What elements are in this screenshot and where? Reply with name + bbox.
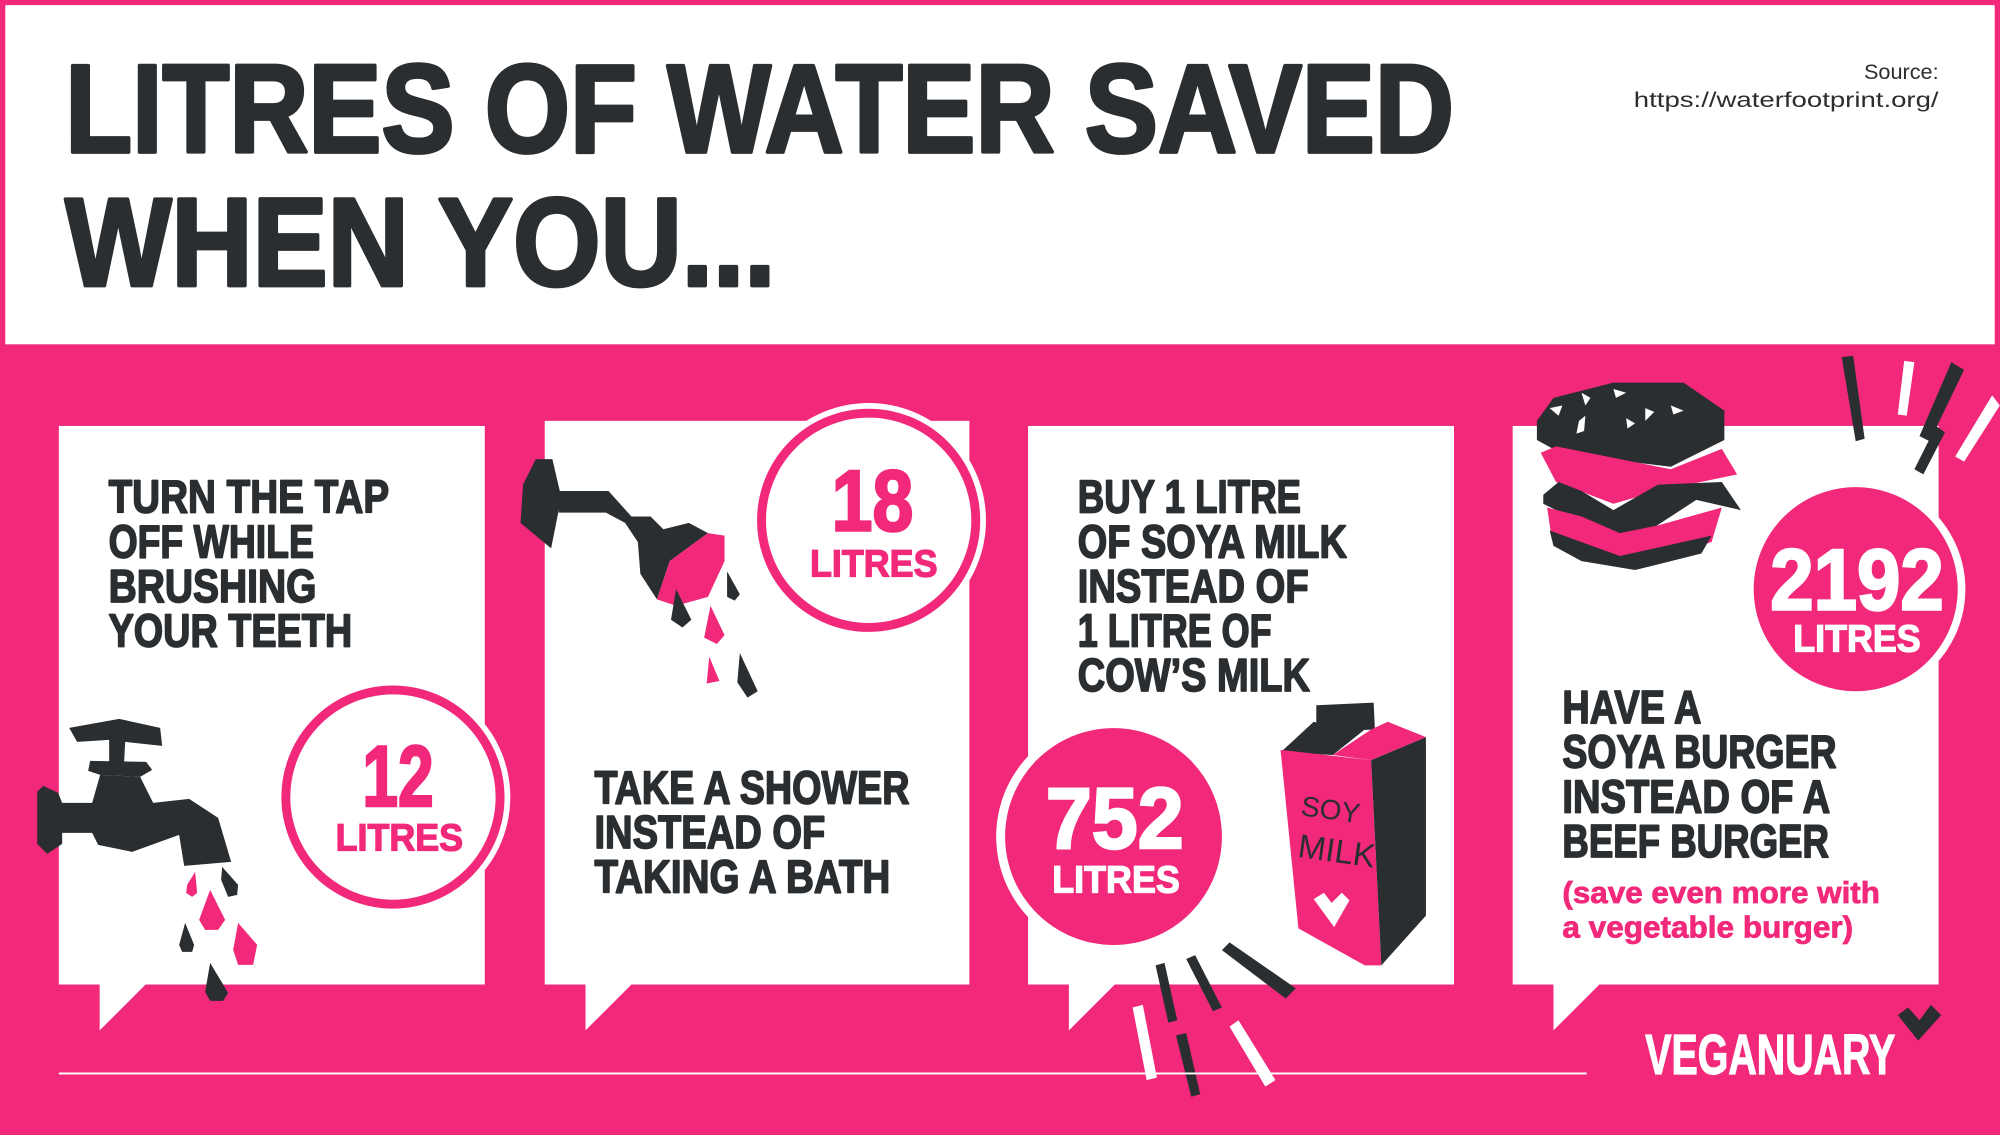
text: soya milk: 1 LITRE OF bbox=[1078, 605, 1272, 657]
icon: milk carton: MILK bbox=[1296, 828, 1378, 875]
logo: veganuary: VEGANUARY bbox=[1645, 1023, 1895, 1086]
icon: milk carton bbox=[1281, 703, 1426, 965]
callout: 752 litres: LITRES bbox=[1052, 859, 1180, 902]
bottom rule bbox=[59, 1073, 1587, 1074]
text: soya milk: INSTEAD OF bbox=[1078, 560, 1309, 612]
text: shower bbox=[594, 761, 909, 903]
callout: 18 litres: 18 bbox=[832, 454, 913, 550]
text: burger: INSTEAD OF A bbox=[1562, 770, 1830, 822]
text: tap: OFF WHILE bbox=[109, 515, 314, 567]
callout: 12 litres: LITRES bbox=[336, 817, 463, 860]
icon: tap bbox=[37, 719, 257, 1001]
decorative burst lines: burger bbox=[1842, 356, 2000, 474]
panel: shower bbox=[520, 421, 969, 1030]
text: tap: YOUR TEETH bbox=[109, 605, 352, 657]
note: vegetable burger: a vegetable burger) bbox=[1562, 910, 1853, 944]
title: WHEN YOU... bbox=[65, 174, 776, 313]
decorative burst lines: milk bbox=[1133, 942, 1296, 1097]
icon: milk carton: SOY bbox=[1299, 790, 1362, 829]
callout: 2192 litres: LITRES bbox=[1793, 618, 1921, 661]
callout: 2192 litres: 2192 bbox=[1770, 533, 1944, 629]
panel: tap bbox=[37, 426, 485, 1030]
callout: 2192 litres bbox=[1746, 480, 1965, 699]
icon: shower head bbox=[520, 459, 758, 698]
callout: 18 litres: LITRES bbox=[810, 542, 938, 585]
text: burger: HAVE A bbox=[1562, 681, 1701, 733]
panel: burger bbox=[1513, 426, 1939, 1030]
title bbox=[65, 40, 1454, 313]
text: soya milk: BUY 1 LITRE bbox=[1078, 471, 1301, 523]
panel: soya milk bbox=[1028, 426, 1454, 1030]
note: vegetable burger: (save even more with bbox=[1562, 876, 1880, 910]
text: soya milk bbox=[1078, 471, 1347, 701]
text: shower: TAKE A SHOWER bbox=[594, 761, 909, 813]
text: shower: TAKING A BATH bbox=[594, 851, 890, 903]
callout: 12 litres: 12 bbox=[362, 729, 434, 825]
icon: burger bbox=[1537, 383, 1741, 570]
callout: 752 litres: 752 bbox=[1046, 771, 1184, 867]
note: vegetable burger bbox=[1562, 876, 1880, 944]
logo: veganuary bbox=[1645, 1005, 1941, 1086]
source note: https://waterfootprint.org/ bbox=[1634, 87, 1940, 112]
source note bbox=[1634, 59, 1940, 112]
source note: Source: bbox=[1864, 59, 1939, 84]
text: burger: SOYA BURGER bbox=[1562, 726, 1837, 778]
text: tap: BRUSHING bbox=[109, 560, 316, 612]
callout: 752 litres bbox=[996, 719, 1231, 954]
title: LITRES OF WATER SAVED bbox=[65, 40, 1454, 179]
text: soya milk: COW’S MILK bbox=[1078, 649, 1310, 701]
text: burger: BEEF BURGER bbox=[1562, 815, 1829, 867]
text: soya milk: OF SOYA MILK bbox=[1078, 515, 1347, 567]
text: burger bbox=[1562, 681, 1837, 867]
callout: 12 litres bbox=[276, 680, 510, 914]
callout: 18 litres bbox=[751, 403, 986, 638]
header panel bbox=[5, 5, 1995, 344]
text: tap: TURN THE TAP bbox=[109, 471, 389, 523]
text: tap bbox=[109, 471, 389, 657]
text: shower: INSTEAD OF bbox=[594, 806, 825, 858]
